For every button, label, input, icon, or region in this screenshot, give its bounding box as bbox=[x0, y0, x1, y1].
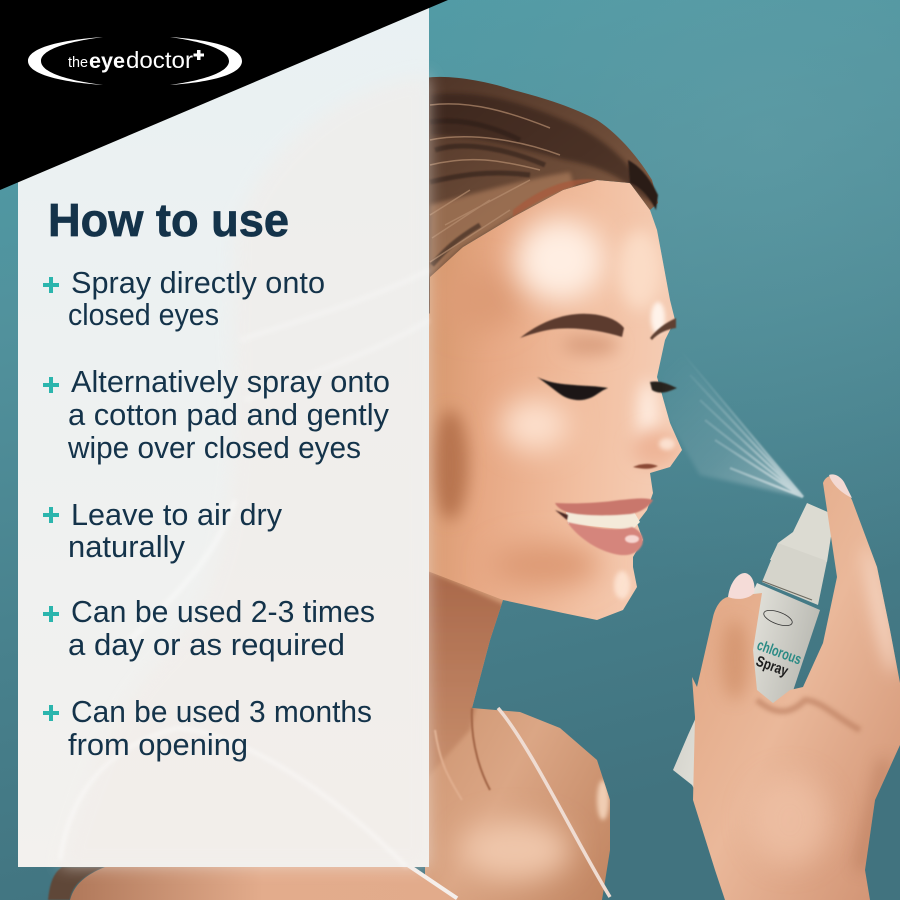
collar bbox=[762, 543, 827, 605]
finger nail bbox=[829, 474, 852, 498]
step 4 bbox=[43, 594, 375, 662]
logo word doctor: doctor bbox=[126, 47, 193, 73]
step 2 line 2: a cotton pad and gently bbox=[68, 397, 389, 432]
bottle logo bbox=[762, 607, 794, 629]
step 3 line 2: naturally bbox=[68, 529, 185, 564]
step 4 line 2: a day or as required bbox=[68, 627, 345, 662]
step 5 line 2: from opening bbox=[68, 727, 248, 762]
plus bullet bbox=[43, 705, 59, 721]
step 3 bbox=[43, 497, 282, 564]
logo word eye: eye bbox=[89, 50, 125, 73]
step 4 line 1: Can be used 2-3 times bbox=[71, 594, 375, 629]
bottle label line two: Spray bbox=[754, 653, 791, 680]
plus bullet bbox=[43, 507, 59, 523]
instruction list bbox=[43, 265, 390, 762]
black corner bbox=[0, 0, 448, 190]
step 5 bbox=[43, 694, 372, 762]
step 2 bbox=[43, 364, 390, 465]
bottle body bbox=[673, 583, 820, 800]
heading: How to use bbox=[48, 194, 289, 246]
logo: the eye doctor bbox=[28, 37, 242, 85]
white panel bbox=[18, 0, 429, 867]
step 1 line 2: closed eyes bbox=[68, 297, 219, 332]
product: spray bottle bbox=[673, 503, 832, 800]
step 2 line 1: Alternatively spray onto bbox=[71, 364, 390, 399]
plus bullet bbox=[43, 277, 59, 293]
closed eye lashes bbox=[537, 377, 608, 400]
lips and teeth bbox=[566, 512, 640, 530]
step 2 line 3: wipe over closed eyes bbox=[67, 430, 361, 465]
plus bullet bbox=[43, 606, 59, 622]
back skin below panel bbox=[70, 867, 456, 900]
spray mist bbox=[662, 335, 803, 497]
hair bbox=[425, 77, 658, 318]
step 5 line 1: Can be used 3 months bbox=[71, 694, 372, 729]
thumbnail bbox=[728, 573, 755, 599]
shoulder and chest bbox=[407, 560, 610, 900]
nostril bbox=[633, 464, 658, 469]
plus bullet bbox=[43, 377, 59, 393]
bottle label: chlorous bbox=[755, 637, 804, 668]
eyebrow bbox=[520, 314, 624, 338]
step 3 line 1: Leave to air dry bbox=[71, 497, 282, 532]
lower hair bbox=[48, 867, 105, 900]
step 1 line 1: Spray directly onto bbox=[71, 265, 325, 300]
step 1 bbox=[43, 265, 325, 332]
nozzle bbox=[770, 503, 832, 562]
logo plus bbox=[194, 50, 204, 60]
logo swoosh right bbox=[170, 37, 242, 85]
logo swoosh left bbox=[28, 37, 103, 85]
faded photo ghost bbox=[60, 75, 429, 867]
strap bbox=[498, 708, 610, 897]
face bbox=[425, 180, 682, 620]
hand bbox=[692, 474, 900, 900]
photo: woman in profile bbox=[48, 77, 682, 900]
logo word the: the bbox=[68, 54, 88, 71]
